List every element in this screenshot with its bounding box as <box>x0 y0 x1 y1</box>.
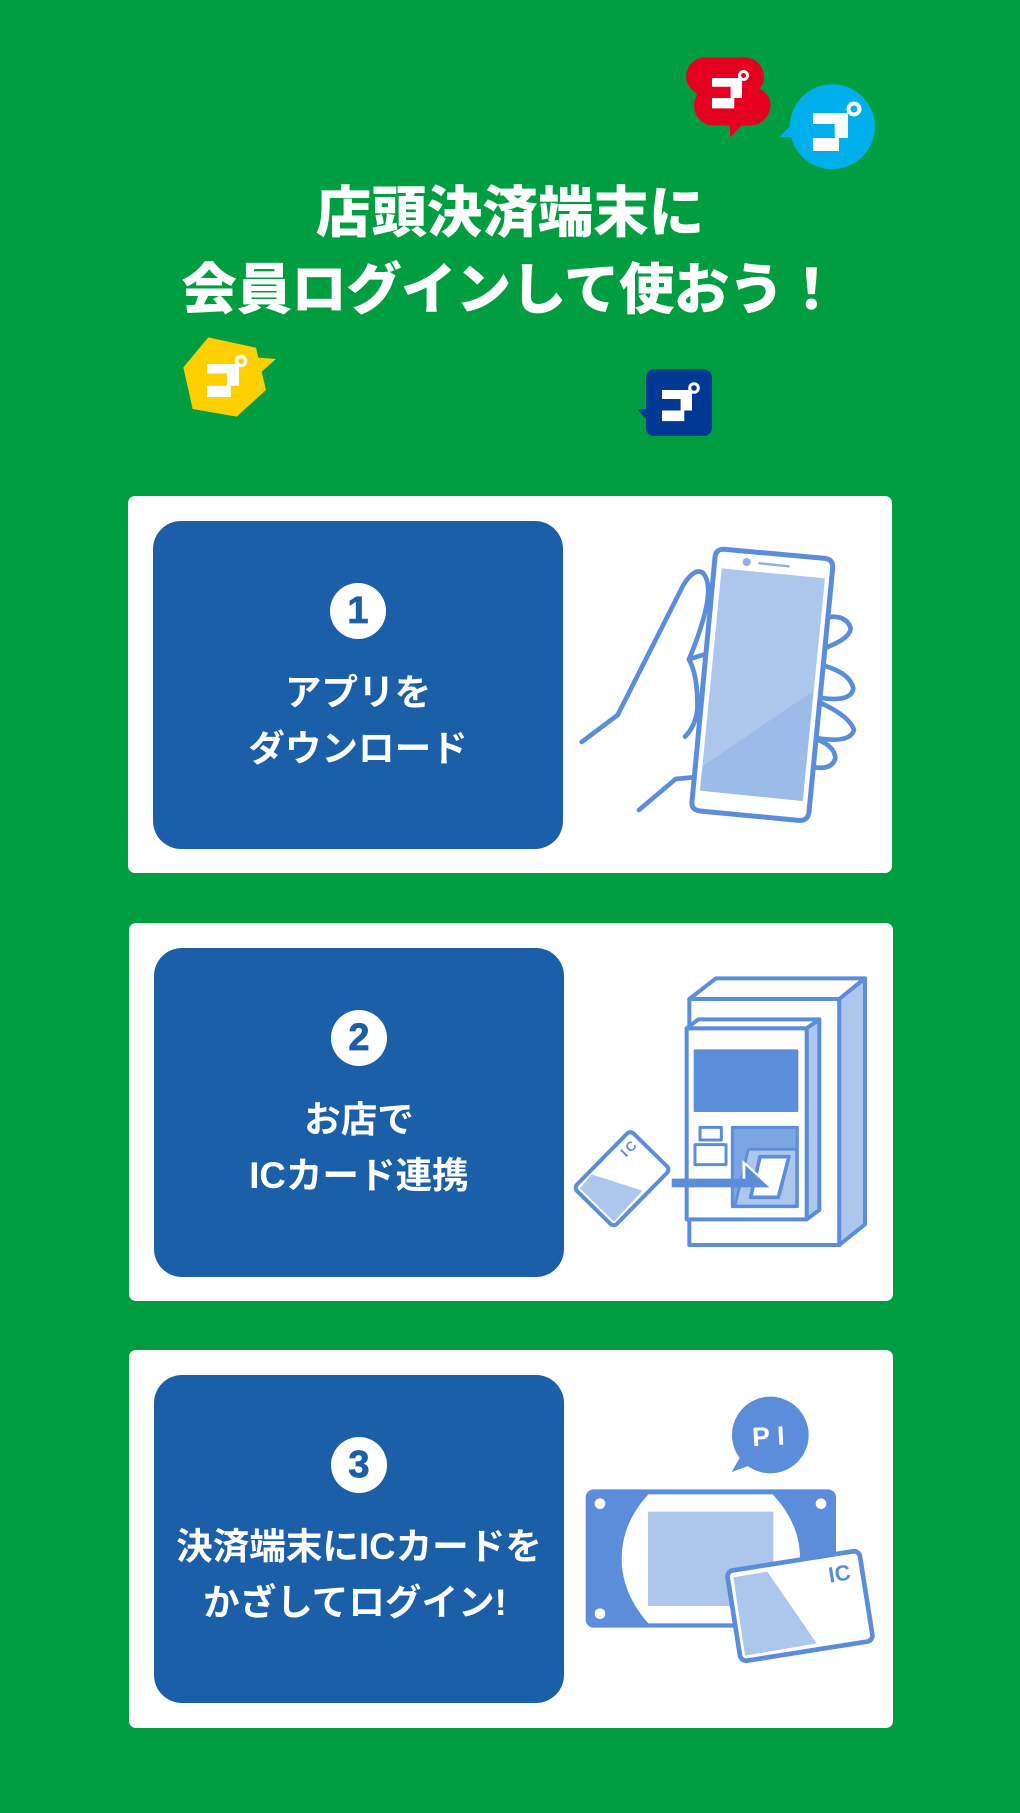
step 2 text <box>249 1099 469 1196</box>
step number 1: 1 <box>347 590 369 632</box>
title <box>181 182 839 321</box>
step 3 text: かざしてログイン! <box>203 1582 507 1623</box>
icon: IC card and payment terminal: IC <box>618 1136 641 1160</box>
panel: step 1 <box>128 496 892 873</box>
step 2 blue panel <box>154 948 564 1277</box>
step 1 text <box>248 672 468 769</box>
title: 会員ログインして使おう！ <box>181 259 839 321</box>
icon: card reader with IC card: IC <box>827 1560 852 1588</box>
panel: step 2 <box>129 923 893 1301</box>
step number 1 <box>330 583 386 639</box>
title: 店頭決済端末に <box>316 182 704 244</box>
icon: hand holding smartphone <box>579 546 856 823</box>
step 3 text <box>176 1526 542 1623</box>
icon: card reader with IC card: PI <box>751 1420 793 1452</box>
icon: navy square logo <box>637 369 712 436</box>
step 3 text: 決済端末にICカードを <box>176 1526 542 1567</box>
icon: red cloud logo <box>686 57 771 137</box>
step 3 blue panel <box>154 1375 564 1703</box>
step 1 blue panel <box>153 521 563 849</box>
step number 3 <box>331 1437 387 1493</box>
icon: IC card and payment terminal <box>574 976 867 1248</box>
panel: step 3 <box>129 1350 893 1728</box>
icon: cyan round logo <box>779 84 875 169</box>
step 2 text: お店で <box>304 1099 414 1140</box>
step number 2: 2 <box>348 1017 370 1059</box>
step number 2 <box>331 1010 387 1066</box>
icon: card reader with IC card <box>586 1396 875 1664</box>
step 1 text: ダウンロード <box>248 728 468 769</box>
icon: yellow polygon logo <box>183 337 276 417</box>
step 1 text: アプリを <box>285 672 431 713</box>
step number 3: 3 <box>348 1444 370 1486</box>
step 2 text: ICカード連携 <box>249 1155 469 1196</box>
speech bubble logos <box>183 57 875 436</box>
